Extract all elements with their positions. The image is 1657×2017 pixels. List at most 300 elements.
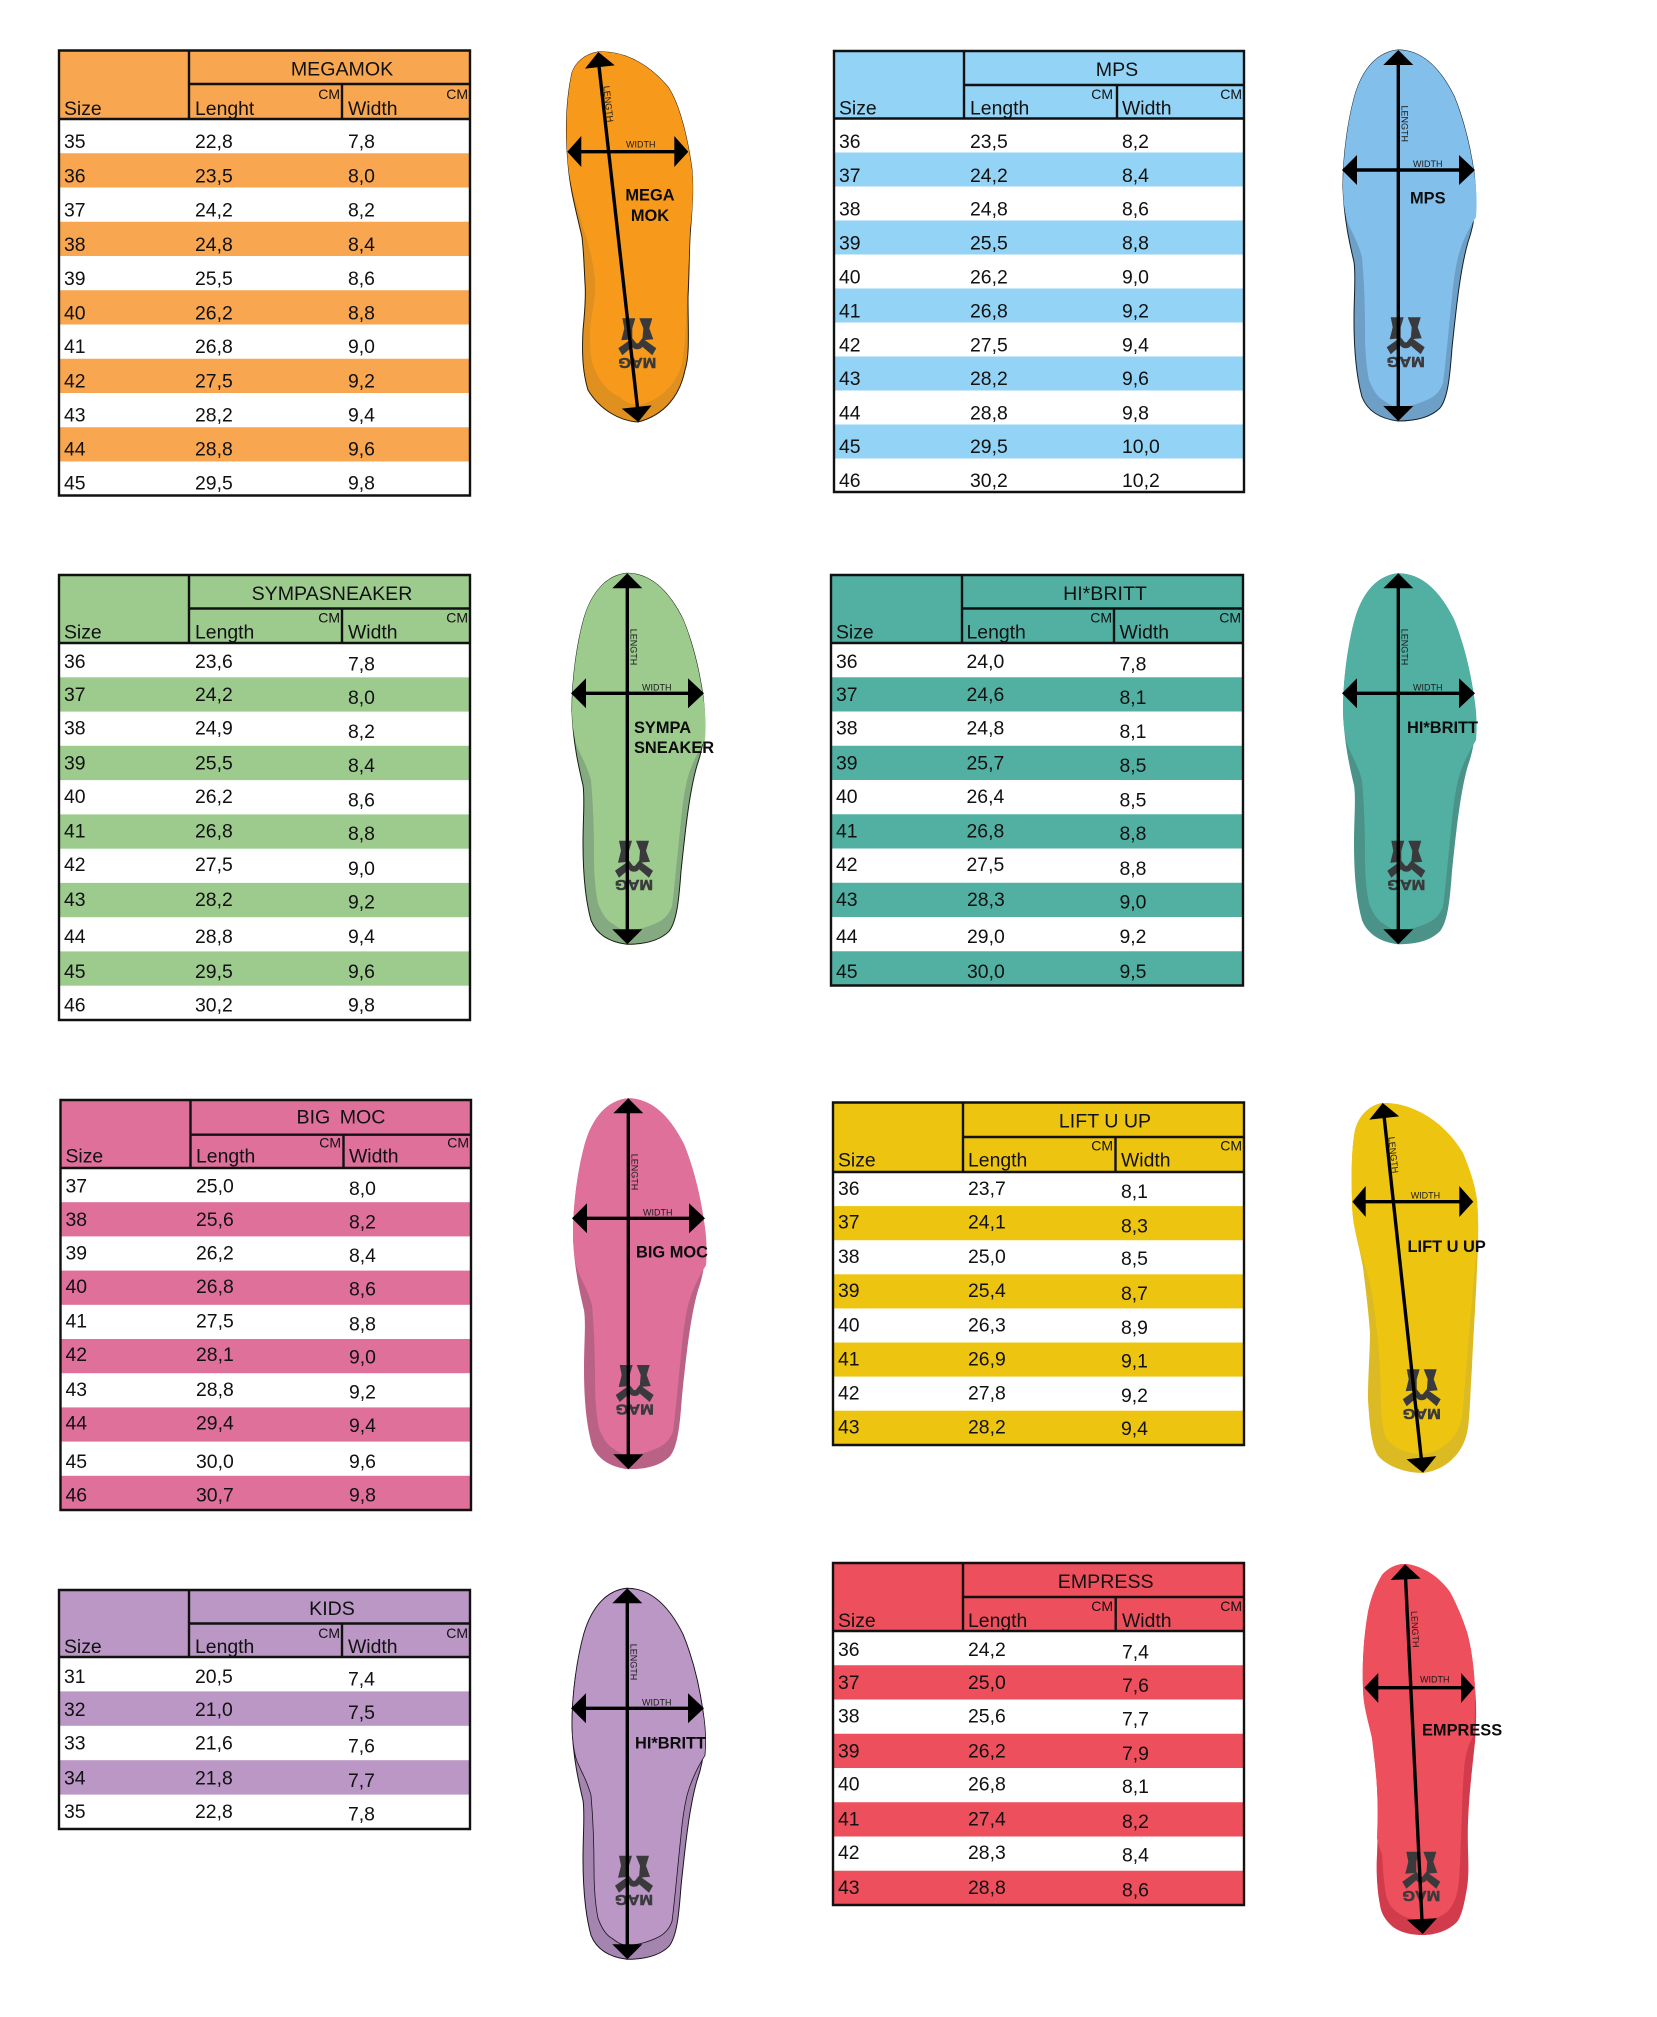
header: BIG MOC: CM bbox=[447, 1134, 469, 1150]
size rows: HI*BRITT: 37 bbox=[836, 684, 858, 706]
size rows: MPS: 43 bbox=[839, 368, 861, 390]
size rows: KIDS bbox=[59, 1666, 470, 1825]
header: MEGAMOK: MEGAMOK bbox=[291, 59, 393, 81]
size rows: MEGAMOK: 40 bbox=[64, 302, 86, 324]
size rows: BIG MOC: 44 bbox=[66, 1412, 87, 1434]
sole and arrows: SYMPA SNEAKER: LENGTH bbox=[628, 629, 638, 665]
size rows: EMPRESS: 27,4 bbox=[968, 1809, 1006, 1831]
size rows: LIFT U UP: 40 bbox=[838, 1315, 860, 1337]
size rows: MEGAMOK: 8,2 bbox=[348, 200, 375, 222]
size rows: EMPRESS: 38 bbox=[838, 1706, 860, 1728]
name: HI*BRITT: HI*BRITT bbox=[1407, 719, 1478, 737]
header: BIG MOC: Width bbox=[349, 1146, 399, 1168]
header: MPS: Length bbox=[970, 98, 1029, 120]
size rows: HI*BRITT: 7,8 bbox=[1120, 653, 1146, 675]
size rows: LIFT U UP: 28,2 bbox=[968, 1416, 1006, 1438]
size rows: BIG MOC: 28,1 bbox=[196, 1344, 234, 1366]
header: MPS bbox=[834, 51, 1244, 120]
size rows: BIG MOC: 8,4 bbox=[349, 1245, 376, 1267]
size rows: MPS: 9,6 bbox=[1122, 368, 1149, 390]
name: SYMPA SNEAKER bbox=[634, 719, 714, 757]
size rows: SYMPASNEAKER: 7,8 bbox=[348, 653, 375, 675]
size rows: MEGAMOK: 26,2 bbox=[195, 302, 233, 324]
size rows: HI*BRITT: 28,3 bbox=[967, 889, 1005, 911]
size rows: LIFT U UP: 9,2 bbox=[1121, 1385, 1148, 1407]
size rows: EMPRESS: 24,2 bbox=[968, 1639, 1006, 1661]
size rows: LIFT U UP: 37 bbox=[838, 1212, 860, 1234]
shoe: LIFT U UP bbox=[1352, 1103, 1486, 1473]
size rows: BIG MOC: 27,5 bbox=[196, 1311, 234, 1333]
size rows: KIDS: 32 bbox=[64, 1699, 86, 1721]
size rows: MEGAMOK: 7,8 bbox=[348, 131, 375, 153]
size rows: EMPRESS bbox=[833, 1639, 1244, 1905]
size rows: SYMPASNEAKER: 28,2 bbox=[195, 889, 233, 911]
sole and arrows: LIFT U UP bbox=[1352, 1103, 1478, 1473]
size rows: MEGAMOK: 25,5 bbox=[195, 268, 233, 290]
size rows: MPS: 8,6 bbox=[1122, 199, 1149, 221]
size rows: MEGAMOK: 24,2 bbox=[195, 200, 233, 222]
size rows: SYMPASNEAKER: 9,2 bbox=[348, 891, 375, 913]
header: MPS: CM bbox=[1220, 86, 1242, 102]
size rows: MPS: 36 bbox=[839, 131, 861, 153]
size rows: KIDS: 7,4 bbox=[348, 1668, 375, 1690]
header: EMPRESS: EMPRESS bbox=[1058, 1571, 1154, 1593]
size rows: MEGAMOK: 9,4 bbox=[348, 404, 375, 426]
size rows: HI*BRITT: 8,1 bbox=[1120, 687, 1146, 709]
size rows: MEGAMOK: 27,5 bbox=[195, 370, 233, 392]
table: HI*BRITT bbox=[831, 575, 1243, 986]
size rows: SYMPASNEAKER: 26,8 bbox=[195, 821, 233, 843]
shoe: BIG MOC bbox=[572, 1098, 708, 1469]
size rows: MPS: 37 bbox=[839, 165, 861, 187]
size rows: EMPRESS: 8,4 bbox=[1122, 1845, 1149, 1867]
size rows: MPS: 45 bbox=[839, 436, 861, 458]
sole and arrows: MEGAMOK: MAG bbox=[618, 354, 656, 370]
size rows: MEGAMOK: 9,6 bbox=[348, 439, 375, 461]
size rows: SYMPASNEAKER: 8,8 bbox=[348, 823, 375, 845]
size rows: HI*BRITT: 25,7 bbox=[966, 752, 1004, 774]
header: MEGAMOK bbox=[59, 50, 470, 120]
size rows: MEGAMOK: 8,4 bbox=[348, 234, 375, 256]
size rows: HI*BRITT: 43 bbox=[836, 889, 858, 911]
header: SYMPASNEAKER: Width bbox=[348, 622, 398, 644]
header: LIFT U UP: Width bbox=[1121, 1150, 1171, 1172]
size rows: MPS: 10,2 bbox=[1122, 470, 1160, 492]
size rows: SYMPASNEAKER: 23,6 bbox=[195, 651, 233, 673]
size rows: KIDS: 21,6 bbox=[195, 1733, 233, 1755]
size rows: EMPRESS: 8,2 bbox=[1122, 1811, 1149, 1833]
size rows: LIFT U UP: 25,0 bbox=[968, 1246, 1006, 1268]
size rows: SYMPASNEAKER: 41 bbox=[64, 821, 86, 843]
size rows: EMPRESS: 26,8 bbox=[968, 1773, 1006, 1795]
size rows: HI*BRITT: 26,8 bbox=[966, 821, 1004, 843]
size rows: LIFT U UP: 38 bbox=[838, 1246, 860, 1268]
size rows: EMPRESS: 43 bbox=[838, 1877, 860, 1899]
size rows: MPS: 41 bbox=[839, 300, 861, 322]
size rows: HI*BRITT: 38 bbox=[836, 718, 858, 740]
header: MPS: Size bbox=[839, 98, 877, 120]
header: EMPRESS: Size bbox=[838, 1610, 876, 1632]
header: KIDS bbox=[59, 1590, 470, 1658]
header: HI*BRITT: Length bbox=[966, 622, 1026, 644]
size rows: EMPRESS: 37 bbox=[838, 1672, 860, 1694]
sole and arrows: LIFT U UP: LENGTH bbox=[1386, 1136, 1400, 1174]
size rows: BIG MOC: 28,8 bbox=[196, 1379, 234, 1401]
sole and arrows: MEGAMOK: LENGTH bbox=[601, 85, 615, 123]
header: LIFT U UP: Size bbox=[838, 1150, 876, 1172]
size rows: BIG MOC: 25,6 bbox=[196, 1209, 234, 1231]
size rows: MEGAMOK: 9,2 bbox=[348, 370, 375, 392]
header: BIG MOC bbox=[60, 1100, 471, 1168]
header: SYMPASNEAKER bbox=[59, 575, 470, 644]
size rows: BIG MOC bbox=[60, 1176, 471, 1510]
size rows: EMPRESS: 7,7 bbox=[1122, 1708, 1149, 1730]
size rows: HI*BRITT: 41 bbox=[836, 821, 858, 843]
sole and arrows: SYMPA SNEAKER bbox=[571, 573, 706, 944]
size rows: BIG MOC: 9,6 bbox=[349, 1451, 376, 1473]
shoe: HI*BRITT bbox=[1342, 573, 1478, 944]
size rows: SYMPASNEAKER: 8,2 bbox=[348, 721, 375, 743]
size rows: MEGAMOK: 8,8 bbox=[348, 302, 375, 324]
size rows: SYMPASNEAKER: 30,2 bbox=[195, 994, 233, 1016]
shoe: MEGAMOK bbox=[567, 52, 693, 422]
sole and arrows: BIG MOC: WIDTH bbox=[643, 1207, 672, 1217]
name: SYMPA SNEAKER: SNEAKER bbox=[634, 739, 714, 757]
size rows: SYMPASNEAKER: 37 bbox=[64, 684, 86, 706]
sole and arrows: LIFT U UP: WIDTH bbox=[1411, 1190, 1440, 1200]
sole and arrows: KIDS bbox=[571, 1588, 706, 1959]
size rows: SYMPASNEAKER: 9,6 bbox=[348, 961, 375, 983]
size rows: HI*BRITT: 44 bbox=[836, 926, 858, 948]
shoe: KIDS bbox=[571, 1588, 706, 1959]
sole and arrows: KIDS: WIDTH bbox=[642, 1697, 672, 1707]
size rows: MPS bbox=[834, 131, 1244, 492]
size rows: EMPRESS: 36 bbox=[838, 1639, 860, 1661]
header: KIDS: CM bbox=[318, 1625, 340, 1641]
header: HI*BRITT: Size bbox=[836, 622, 874, 644]
size rows: HI*BRITT: 8,5 bbox=[1120, 790, 1146, 812]
shoe: EMPRESS bbox=[1363, 1564, 1502, 1935]
table: EMPRESS bbox=[833, 1563, 1244, 1905]
size rows: BIG MOC: 45 bbox=[66, 1451, 87, 1473]
size rows: LIFT U UP: 9,1 bbox=[1121, 1351, 1148, 1373]
header: MEGAMOK: Width bbox=[348, 98, 398, 120]
size rows: MPS: 9,2 bbox=[1122, 300, 1149, 322]
name: BIG MOC: BIG MOC bbox=[636, 1244, 708, 1262]
size rows: BIG MOC: 26,2 bbox=[196, 1242, 234, 1264]
size rows: MPS: 23,5 bbox=[970, 131, 1008, 153]
header: KIDS: CM bbox=[446, 1625, 468, 1641]
size rows: MEGAMOK: 45 bbox=[64, 472, 86, 494]
header: MPS: MPS bbox=[1096, 59, 1138, 81]
header: MEGAMOK: CM bbox=[318, 86, 340, 102]
size rows: MEGAMOK: 8,0 bbox=[348, 165, 375, 187]
size rows: BIG MOC: 39 bbox=[66, 1242, 87, 1264]
size rows: LIFT U UP: 8,3 bbox=[1121, 1216, 1148, 1238]
sole and arrows: MPS: LENGTH bbox=[1400, 106, 1410, 142]
size rows: KIDS: 7,5 bbox=[348, 1702, 375, 1724]
header: LIFT U UP: CM bbox=[1220, 1138, 1242, 1154]
name: HI*BRITT (kids): HI*BRITT bbox=[635, 1734, 706, 1752]
size rows: BIG MOC: 9,4 bbox=[349, 1415, 376, 1437]
header: HI*BRITT: HI*BRITT bbox=[1063, 583, 1147, 605]
size rows: SYMPASNEAKER: 26,2 bbox=[195, 786, 233, 808]
sole and arrows: MPS bbox=[1342, 50, 1477, 421]
header: LIFT U UP: Length bbox=[968, 1150, 1027, 1172]
size rows: EMPRESS: 7,4 bbox=[1122, 1641, 1149, 1663]
shoe: MPS bbox=[1342, 50, 1477, 421]
size rows: MPS: 8,8 bbox=[1122, 233, 1149, 255]
size rows: BIG MOC: 30,7 bbox=[196, 1484, 234, 1506]
sole and arrows: MEGAMOK bbox=[567, 52, 693, 422]
size rows: BIG MOC: 9,0 bbox=[349, 1347, 376, 1369]
sole and arrows: BIG MOC bbox=[572, 1098, 707, 1469]
size rows: EMPRESS: 28,8 bbox=[968, 1877, 1006, 1899]
sole and arrows: BIG MOC: LENGTH bbox=[630, 1154, 640, 1190]
header: SYMPASNEAKER: CM bbox=[446, 610, 468, 626]
size rows: SYMPASNEAKER: 9,8 bbox=[348, 994, 375, 1016]
size rows: MEGAMOK: 41 bbox=[64, 336, 86, 358]
size rows: LIFT U UP: 36 bbox=[838, 1178, 860, 1200]
size rows: KIDS: 21,8 bbox=[195, 1767, 233, 1789]
size rows: LIFT U UP: 41 bbox=[838, 1348, 860, 1370]
header: EMPRESS bbox=[833, 1563, 1244, 1632]
sole and arrows: EMPRESS: LENGTH bbox=[1409, 1611, 1421, 1648]
size rows: MPS: 30,2 bbox=[970, 470, 1008, 492]
header: SYMPASNEAKER: SYMPASNEAKER bbox=[252, 583, 412, 605]
size rows: EMPRESS: 8,1 bbox=[1122, 1776, 1149, 1798]
size rows: HI*BRITT: 8,1 bbox=[1120, 721, 1146, 743]
header: KIDS: Width bbox=[348, 1636, 398, 1658]
size rows: MEGAMOK: 35 bbox=[64, 131, 86, 153]
size rows: HI*BRITT: 9,5 bbox=[1120, 961, 1146, 983]
size rows: MEGAMOK: 23,5 bbox=[195, 165, 233, 187]
size rows: BIG MOC: 8,8 bbox=[349, 1313, 376, 1335]
header: MPS: CM bbox=[1091, 86, 1113, 102]
size rows: SYMPASNEAKER: 8,4 bbox=[348, 755, 375, 777]
size rows: BIG MOC: 9,2 bbox=[349, 1382, 376, 1404]
size rows: EMPRESS: 7,9 bbox=[1122, 1743, 1149, 1765]
size rows: HI*BRITT: 30,0 bbox=[967, 961, 1005, 983]
size rows: SYMPASNEAKER: 40 bbox=[64, 786, 86, 808]
size rows: MPS: 10,0 bbox=[1122, 436, 1160, 458]
header: BIG MOC: BIG MOC bbox=[297, 1107, 385, 1129]
sole and arrows: HI*BRITT: MAG bbox=[1387, 876, 1425, 892]
size rows: LIFT U UP: 25,4 bbox=[968, 1280, 1006, 1302]
size rows: SYMPASNEAKER: 43 bbox=[64, 889, 86, 911]
header: EMPRESS: Width bbox=[1122, 1610, 1172, 1632]
name: MEGAMOK: MOK bbox=[631, 207, 669, 225]
size rows: BIG MOC: 38 bbox=[66, 1209, 87, 1231]
size rows: KIDS: 21,0 bbox=[195, 1699, 233, 1721]
name: EMPRESS: EMPRESS bbox=[1422, 1722, 1502, 1740]
size rows: SYMPASNEAKER: 25,5 bbox=[195, 752, 233, 774]
size rows: BIG MOC: 42 bbox=[66, 1344, 87, 1366]
size rows: LIFT U UP: 23,7 bbox=[968, 1178, 1006, 1200]
size rows: MEGAMOK bbox=[59, 131, 470, 494]
size rows: BIG MOC: 43 bbox=[66, 1379, 87, 1401]
size rows: HI*BRITT: 39 bbox=[836, 752, 858, 774]
header: LIFT U UP: LIFT U UP bbox=[1059, 1110, 1151, 1132]
size rows: SYMPASNEAKER: 36 bbox=[64, 651, 86, 673]
table: KIDS bbox=[59, 1590, 470, 1829]
shoe: SYMPA SNEAKER bbox=[571, 573, 714, 944]
header: EMPRESS: Length bbox=[968, 1610, 1027, 1632]
table: SYMPASNEAKER bbox=[59, 575, 470, 1020]
size rows: BIG MOC: 8,2 bbox=[349, 1212, 376, 1234]
size rows: BIG MOC: 41 bbox=[66, 1311, 87, 1333]
size rows: MEGAMOK: 29,5 bbox=[195, 472, 233, 494]
size rows: MPS: 26,2 bbox=[970, 266, 1008, 288]
size rows: EMPRESS: 42 bbox=[838, 1842, 860, 1864]
sole and arrows: MPS: WIDTH bbox=[1413, 159, 1442, 169]
size rows: EMPRESS: 25,0 bbox=[968, 1672, 1006, 1694]
sole and arrows: HI*BRITT: LENGTH bbox=[1400, 629, 1410, 665]
sole and arrows: MEGAMOK: WIDTH bbox=[626, 140, 656, 150]
name: MEGAMOK: MEGA bbox=[625, 187, 675, 205]
size rows: EMPRESS: 26,2 bbox=[968, 1740, 1006, 1762]
header: BIG MOC: Length bbox=[196, 1146, 255, 1168]
table: MPS bbox=[834, 51, 1244, 492]
sole and arrows: MPS: MAG bbox=[1387, 353, 1425, 369]
size rows: MPS: 46 bbox=[839, 470, 861, 492]
size rows: SYMPASNEAKER: 28,8 bbox=[195, 926, 233, 948]
size rows: EMPRESS: 28,3 bbox=[968, 1842, 1006, 1864]
size rows: LIFT U UP: 39 bbox=[838, 1280, 860, 1302]
size rows: MPS: 40 bbox=[839, 266, 861, 288]
table: MEGAMOK bbox=[59, 50, 470, 496]
size rows: MPS: 24,2 bbox=[970, 165, 1008, 187]
table: LIFT U UP bbox=[833, 1102, 1244, 1445]
header: HI*BRITT bbox=[831, 575, 1243, 644]
sole and arrows: EMPRESS: MAG bbox=[1402, 1887, 1440, 1903]
size rows: LIFT U UP: 26,3 bbox=[968, 1315, 1006, 1337]
size rows: HI*BRITT: 8,8 bbox=[1120, 858, 1146, 880]
size rows: HI*BRITT: 24,0 bbox=[966, 651, 1004, 673]
size rows: SYMPASNEAKER: 27,5 bbox=[195, 854, 233, 876]
header: SYMPASNEAKER: CM bbox=[318, 610, 340, 626]
size rows: SYMPASNEAKER: 9,4 bbox=[348, 926, 375, 948]
size rows: KIDS: 7,6 bbox=[348, 1735, 375, 1757]
name: MEGAMOK bbox=[625, 187, 675, 225]
name: MPS: MPS bbox=[1410, 189, 1446, 207]
name: SYMPA SNEAKER: SYMPA bbox=[634, 719, 691, 737]
header: SYMPASNEAKER: Size bbox=[64, 622, 102, 644]
size rows: MPS: 42 bbox=[839, 334, 861, 356]
size rows: EMPRESS: 39 bbox=[838, 1740, 860, 1762]
header: LIFT U UP bbox=[833, 1102, 1244, 1172]
size rows: KIDS: 20,5 bbox=[195, 1666, 233, 1688]
header: KIDS: Size bbox=[64, 1636, 102, 1658]
size rows: MPS: 8,2 bbox=[1122, 131, 1149, 153]
size rows: KIDS: 22,8 bbox=[195, 1801, 233, 1823]
sole and arrows: KIDS: MAG bbox=[615, 1891, 653, 1907]
table: BIG MOC bbox=[60, 1100, 471, 1510]
size rows: SYMPASNEAKER: 29,5 bbox=[195, 961, 233, 983]
size rows: BIG MOC: 25,0 bbox=[196, 1176, 234, 1198]
size rows: EMPRESS: 41 bbox=[838, 1809, 860, 1831]
size rows: SYMPASNEAKER: 9,0 bbox=[348, 858, 375, 880]
size rows: LIFT U UP: 24,1 bbox=[968, 1212, 1006, 1234]
size rows: MPS: 39 bbox=[839, 233, 861, 255]
size rows: LIFT U UP: 8,1 bbox=[1121, 1181, 1148, 1203]
size rows: HI*BRITT: 29,0 bbox=[967, 926, 1005, 948]
size rows: MPS: 9,0 bbox=[1122, 266, 1149, 288]
size rows: BIG MOC: 37 bbox=[66, 1176, 87, 1198]
size rows: MEGAMOK: 24,8 bbox=[195, 234, 233, 256]
size rows: LIFT U UP: 43 bbox=[838, 1416, 860, 1438]
size rows: HI*BRITT: 27,5 bbox=[966, 854, 1004, 876]
header: MEGAMOK: Size bbox=[64, 98, 102, 120]
size rows: MPS: 26,8 bbox=[970, 300, 1008, 322]
size rows: MPS: 27,5 bbox=[970, 334, 1008, 356]
sole and arrows: SYMPA SNEAKER: WIDTH bbox=[642, 682, 672, 692]
sole and arrows: SYMPA SNEAKER: MAG bbox=[615, 876, 653, 892]
sole and arrows: LIFT U UP: MAG bbox=[1403, 1405, 1441, 1421]
size rows: MPS: 25,5 bbox=[970, 233, 1008, 255]
size rows: HI*BRITT: 40 bbox=[836, 786, 858, 808]
size rows: MPS: 28,8 bbox=[970, 402, 1008, 424]
header: BIG MOC: Size bbox=[66, 1146, 103, 1168]
size rows: MPS: 28,2 bbox=[970, 368, 1008, 390]
size rows: HI*BRITT: 42 bbox=[836, 854, 858, 876]
size rows: KIDS: 7,7 bbox=[348, 1770, 375, 1792]
sole and arrows: HI*BRITT bbox=[1342, 573, 1477, 944]
sole and arrows: KIDS: LENGTH bbox=[628, 1644, 638, 1680]
sole and arrows: BIG MOC: MAG bbox=[616, 1401, 654, 1417]
size rows: SYMPASNEAKER: 45 bbox=[64, 961, 86, 983]
size rows: MPS: 9,8 bbox=[1122, 402, 1149, 424]
header: LIFT U UP: CM bbox=[1091, 1138, 1113, 1154]
size rows: SYMPASNEAKER bbox=[59, 651, 470, 1016]
sole and arrows: EMPRESS: WIDTH bbox=[1420, 1674, 1450, 1684]
header: MPS: Width bbox=[1122, 98, 1172, 120]
header: SYMPASNEAKER: Length bbox=[195, 622, 254, 644]
size rows: LIFT U UP: 8,9 bbox=[1121, 1317, 1148, 1339]
size rows: HI*BRITT: 24,8 bbox=[966, 718, 1004, 740]
size rows: KIDS: 7,8 bbox=[348, 1803, 375, 1825]
size rows: SYMPASNEAKER: 38 bbox=[64, 718, 86, 740]
size rows: HI*BRITT: 9,2 bbox=[1120, 926, 1146, 948]
size rows: LIFT U UP: 27,8 bbox=[968, 1382, 1006, 1404]
size rows: EMPRESS: 7,6 bbox=[1122, 1675, 1149, 1697]
size rows: EMPRESS: 8,6 bbox=[1122, 1879, 1149, 1901]
size rows: BIG MOC: 30,0 bbox=[196, 1451, 234, 1473]
size rows: MEGAMOK: 26,8 bbox=[195, 336, 233, 358]
size rows: MEGAMOK: 22,8 bbox=[195, 131, 233, 153]
size rows: MEGAMOK: 36 bbox=[64, 165, 86, 187]
size rows: EMPRESS: 25,6 bbox=[968, 1706, 1006, 1728]
size rows: KIDS: 33 bbox=[64, 1733, 86, 1755]
size rows: EMPRESS: 40 bbox=[838, 1773, 860, 1795]
size rows: LIFT U UP: 8,5 bbox=[1121, 1248, 1148, 1270]
size rows: MPS: 24,8 bbox=[970, 199, 1008, 221]
size rows: HI*BRITT: 45 bbox=[836, 961, 858, 983]
size rows: SYMPASNEAKER: 42 bbox=[64, 854, 86, 876]
size rows: KIDS: 31 bbox=[64, 1666, 86, 1688]
size rows: MEGAMOK: 43 bbox=[64, 404, 86, 426]
size rows: BIG MOC: 8,6 bbox=[349, 1279, 376, 1301]
size rows: KIDS: 35 bbox=[64, 1801, 86, 1823]
size rows: BIG MOC: 9,8 bbox=[349, 1484, 376, 1506]
header: EMPRESS: CM bbox=[1220, 1598, 1242, 1614]
size rows: SYMPASNEAKER: 24,2 bbox=[195, 684, 233, 706]
size rows: MEGAMOK: 39 bbox=[64, 268, 86, 290]
size rows: BIG MOC: 26,8 bbox=[196, 1276, 234, 1298]
size rows: BIG MOC: 29,4 bbox=[196, 1412, 234, 1434]
header: BIG MOC: CM bbox=[319, 1134, 341, 1150]
size rows: BIG MOC: 40 bbox=[66, 1276, 87, 1298]
